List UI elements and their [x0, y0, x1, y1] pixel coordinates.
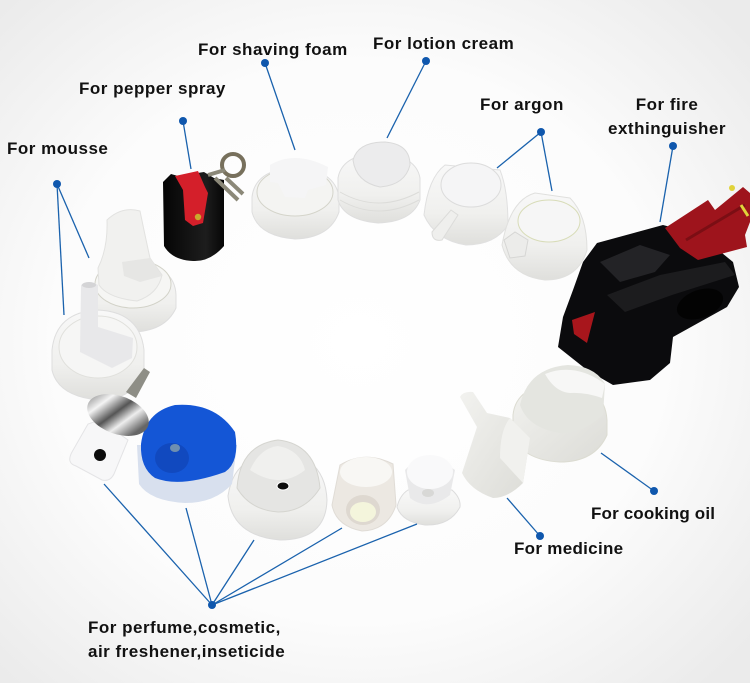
cap: lotion cream [338, 142, 420, 223]
cap: blue [137, 405, 237, 503]
label: pepper spray: For pepper spray [79, 79, 226, 98]
label: argon: For argon [480, 95, 564, 114]
cap: argon spout [424, 163, 508, 245]
cap: white dome [228, 440, 327, 540]
label: cooking oil: For cooking oil [591, 504, 715, 523]
connector lines [57, 61, 673, 605]
cap: chrome pump [70, 368, 155, 480]
cap: pepper spray [163, 154, 244, 261]
label: perfume and cosmetic: air freshener,inseticide [88, 642, 285, 661]
label: fire extinguisher: exthinguisher [608, 119, 726, 138]
label: mousse: For mousse [7, 139, 108, 158]
cap: cylinder hole [332, 457, 396, 531]
label: fire extinguisher: For fire [636, 95, 698, 114]
cap: medicine [460, 392, 530, 498]
cap: mousse nozzle [52, 282, 144, 400]
cap: cooking oil [513, 365, 607, 462]
label: shaving foam: For shaving foam [198, 40, 348, 59]
cap: mousse tall [95, 210, 176, 332]
cap: small round [397, 455, 460, 525]
label: medicine: For medicine [514, 539, 623, 558]
cap: fire extinguisher [558, 185, 750, 385]
connector dots [53, 57, 677, 609]
label: perfume and cosmetic: For perfume,cosmetic, [88, 618, 281, 637]
label: lotion cream: For lotion cream [373, 34, 514, 53]
cap: shaving foam [252, 158, 339, 239]
cap: argon box [502, 193, 587, 280]
